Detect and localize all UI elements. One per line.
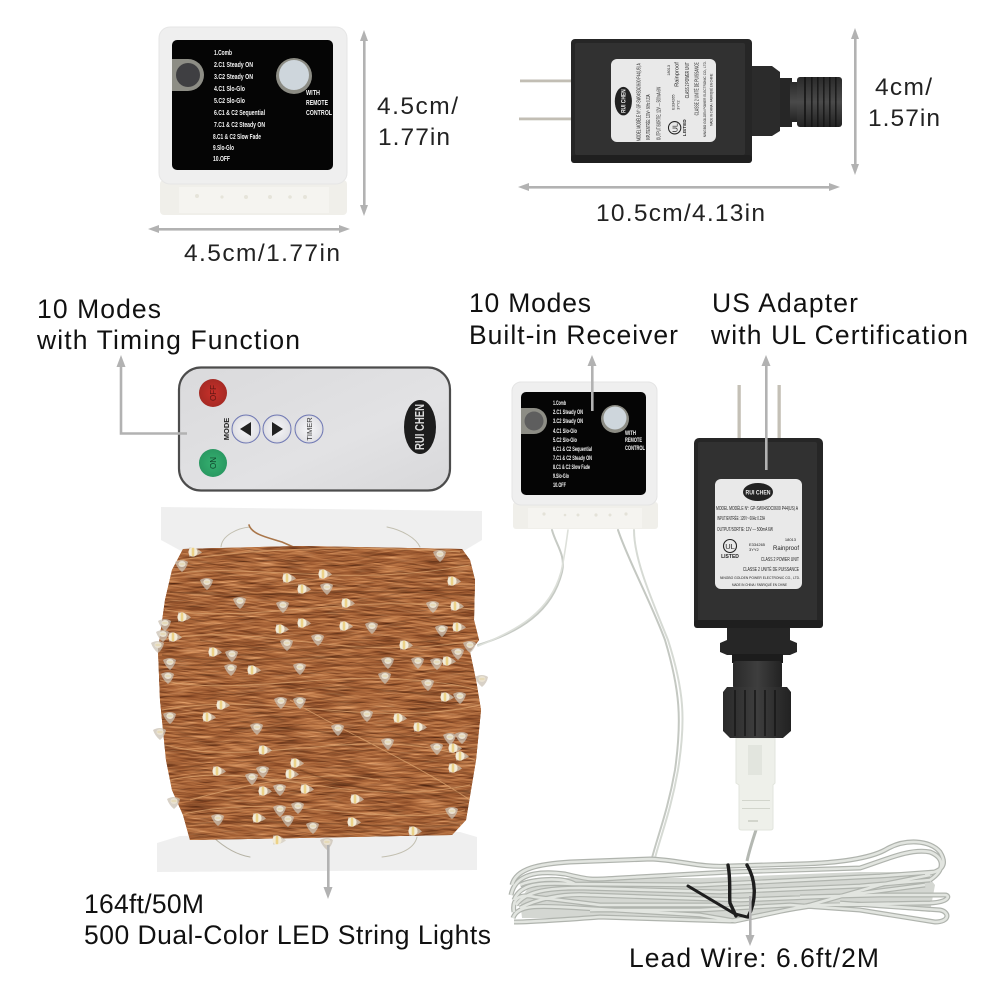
text: mode list: 1.Comb [553,401,566,407]
text: string light spec: 164ft/50M [84,889,204,919]
heading: US adapter [710,288,968,350]
button: off [199,379,227,407]
text: mode list: 9.Slo-Glo [553,474,569,480]
text: with remote control: CONTROL [625,446,645,452]
text: with remote control [625,431,645,452]
wires: receiver to lead coil [618,530,683,858]
adapter label: 3YY2 [676,100,680,110]
adapter label: RUI CHEN [746,490,771,496]
prongs [519,80,571,120]
arrow: lead wire [746,896,754,946]
text: mode list: 5.C2 Slo-Glo [553,438,577,444]
text: receiver height: 4.5cm/ [377,93,458,120]
knurled nut [723,687,791,738]
text: mode: MODE [222,418,231,440]
LED bulbs [161,547,469,850]
adapter label: MODEL MODÈLE N°: GP-SW04SDC0600 P44(US) A [635,63,642,141]
text: mode list: 2.C1 Steady ON [553,410,583,416]
loose wire ends [213,525,420,857]
text: mode list: 10.OFF [213,156,231,163]
arrow: adapter height [851,28,859,175]
adapter label: 18013 [667,65,671,76]
protruding bulbs [151,619,488,809]
text: receiver width: 4.5cm/1.77in [184,240,340,267]
adapter label: NINGBO GOLDEN POWER ELECTRONIC CO., LTD. [703,61,707,137]
adapter label: MADE IN CHINA / FABRIQUÉ EN CHINE [709,73,714,126]
adapter label: UL [725,542,735,551]
heading: remote control [36,294,300,355]
adapter body [694,438,823,663]
text: adapter height: 1.57in [868,105,940,132]
text: mode list: 5.C2 Slo-Glo [214,98,245,105]
adapter label: UL [671,123,679,132]
adapter label: INPUT/ENTRÉE: 120V~ 60Hz 0.23A [717,515,765,522]
text: adapter width: 10.5cm/4.13in [596,200,765,227]
adapter label: CLASSE 2 UNITÉ DE PUISSANCE [743,566,799,573]
adapter label [611,59,716,142]
adapter label: E334265 [672,94,676,110]
text: adapter height [868,74,940,132]
heading: built-in receiver: 10 Modes [469,288,591,318]
prongs [738,385,781,439]
heading: built-in receiver: Built-in Receiver [469,320,678,350]
adapter label: 3YY2 [749,547,760,552]
adapter label: OUTPUT/SORTIE: 12V --- 500mA 6W [656,87,662,140]
text: mode list: 4.C1 Slo-Glo [553,429,577,435]
spool card [157,507,482,872]
black zip ties [688,865,754,917]
arrow: receiver height [360,30,368,216]
panel: receiver product shot with dimensions [148,27,458,267]
text: mode list: 3.C2 Steady ON [214,74,253,81]
button: off: OFF [209,385,218,401]
receiver housing [512,382,658,529]
heading: remote control: with Timing Function [36,325,300,355]
icon: sensor window [521,408,547,434]
wire: plug to coil [747,830,756,861]
heading: remote control: 10 Modes [37,294,161,324]
wires: receiver to spool [478,530,568,646]
panel: adapter product shot with dimensions [518,28,940,227]
text: receiver height: 1.77in [378,124,450,151]
coiled wire [511,842,948,922]
text: mode list: 8.C1 & C2 Slow Fade [213,134,261,141]
adapter label: MODEL MODÈLE N°: GP-SW04SDC0600 P44(US) A [716,505,798,512]
text: lead wire length: Lead Wire: 6.6ft/2M [629,943,879,973]
logo: Rui Chen [404,400,436,454]
copper wire coil [158,546,481,840]
adapter label: CLASS 2 POWER UNIT [685,62,691,98]
button: on [199,449,227,477]
panel: receiver in assembly [512,382,658,529]
adapter label: LISTED [682,119,688,136]
text: with remote control: REMOTE [306,100,328,107]
adapter label: INPUT/ENTRÉE: 120V~ 60Hz 0.23A [645,94,652,140]
panel: remote control [179,368,450,490]
text: mode list: 9.Slo-Glo [213,145,234,152]
button: previous [232,415,260,443]
adapter body [571,39,780,163]
heading: US adapter: with UL Certification [710,320,968,350]
text: with remote control: WITH [306,90,320,97]
text: mode list [213,50,265,163]
text: mode list: 1.Comb [214,50,232,57]
text: mode list: 4.C1 Slo-Glo [214,86,245,93]
adapter label: CLASSE 2 UNITÉ DE PUISSANCE [693,62,700,115]
adapter label: RUI CHEN [621,89,628,113]
adapter label [715,479,802,589]
heading: built-in receiver [469,288,678,350]
text: with remote control: REMOTE [625,438,642,444]
text: receiver height [377,93,458,151]
receiver housing [159,27,347,215]
icon: receiver button [601,405,629,433]
remote body [179,368,450,490]
button: next [263,415,291,443]
text: mode list: 7.C1 & C2 Steady ON [553,456,592,462]
heading: US adapter: US Adapter [712,288,858,318]
text: mode list: 10.OFF [553,483,566,489]
text: with remote control: WITH [625,431,636,437]
panel: lead wire coil [511,842,948,922]
text: mode list: 3.C2 Steady ON [553,419,583,425]
text: mode list: 8.C1 & C2 Slow Fade [553,465,590,471]
button: timer [295,415,323,443]
arrow: remote callout [116,355,187,434]
icon: sensor window [172,59,204,91]
logo: Rui Chen: RUI CHEN [413,404,427,450]
arrow: receiver callout [588,355,596,411]
text: adapter height: 4cm/ [875,74,932,101]
text: mode list: 6.C1 & C2 Sequential [553,447,592,453]
text: mode list [553,401,592,489]
adapter label: CLASS 2 POWER UNIT [761,557,799,563]
adapter label: LISTED [721,554,739,560]
arrow: string lights [324,845,332,899]
icon: receiver button [276,58,312,94]
arrow: adapter width [518,183,840,191]
connector thread [778,77,842,127]
clear plug [736,738,775,830]
button: timer: TIMER [305,417,314,441]
text: string light spec [84,889,491,950]
text: with remote control: CONTROL [306,110,333,117]
panel: string light spool [151,507,488,872]
arrow: receiver width [148,225,350,233]
panel: US adapter [694,385,823,830]
adapter label: 18013 [785,537,797,542]
button: on: ON [209,457,218,469]
text: mode list: 7.C1 & C2 Steady ON [214,122,265,129]
text: mode list: 6.C1 & C2 Sequential [214,110,265,117]
adapter label: E334265 [749,542,766,547]
adapter label: NINGBO GOLDEN POWER ELECTRONIC CO., LTD. [720,575,800,580]
threaded neck [733,661,782,689]
adapter label: MADE IN CHINA / FABRIQUÉ EN CHINE [732,582,787,587]
arrow: adapter callout [762,355,770,470]
adapter label: Rainproof [773,546,799,552]
adapter label: OUTPUT/SORTIE: 12V --- 500mA 6W [717,527,773,533]
text: string light spec: 500 Dual-Color LED String Lights [84,920,491,950]
adapter label: Rainproof [674,62,680,87]
text: mode list: 2.C1 Steady ON [214,62,253,69]
text: with remote control [306,90,333,117]
